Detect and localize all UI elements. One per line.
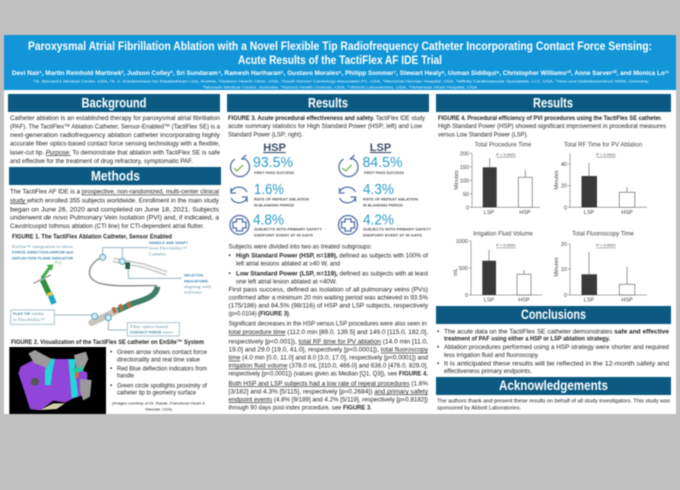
significant decreases paragraph: total procedure time (112.0 min [89.0, 139.5] and 149.0 [115.0, 182.0], bbox=[228, 329, 428, 336]
subgroup text: • bbox=[228, 253, 231, 260]
label: deflection indicators: DEFLECTION bbox=[184, 274, 203, 278]
background text bbox=[10, 115, 221, 165]
figure 1 heading: FIGURE 1. The TactiFlex Ablation Catheter, Sensor Enabled bbox=[12, 233, 172, 240]
background text: and effective for the treatment of drug refractory, symptomatic PAF. bbox=[10, 158, 193, 165]
repeat procedures paragraph: [3/182] and 4.3% [5/115], respectively [p=0.2684]) and primary safety bbox=[228, 388, 429, 395]
image credit: Vascular, USA) bbox=[145, 406, 173, 412]
conclusions text bbox=[437, 328, 670, 375]
figure 3: LSP statistics: 4.2% bbox=[363, 212, 394, 228]
figure 3: LSP statistics: 84.5% bbox=[362, 155, 403, 171]
icon: repeat arrows bbox=[231, 187, 247, 203]
label: handle and shaft bbox=[149, 241, 189, 257]
poster background bbox=[4, 35, 676, 414]
significant decreases paragraph: respectively [p<0.001]), total RF time for PV ablation (14.0 min [11.0, bbox=[228, 338, 428, 345]
icon: repeat arrows bbox=[340, 187, 356, 203]
figure 4 caption: versus Low Standard Power (LSP). bbox=[438, 131, 528, 138]
label: ensite bbox=[12, 244, 74, 264]
chart: total procedure time: P < 0.0001 bbox=[496, 152, 516, 157]
chart: total fluoroscopy time: 10 bbox=[561, 267, 567, 273]
label: deflection indicators: INDICATORS bbox=[184, 279, 209, 283]
chart: total fluoroscopy time: HSP bbox=[621, 298, 633, 304]
chart: total fluoroscopy time: P < 0.0001 bbox=[596, 243, 616, 248]
chart: total procedure time: 100 bbox=[460, 178, 469, 184]
figure 3: HSP statistics: HSP bbox=[263, 142, 286, 154]
subgroup text: left atrial lesions ablated at ≥40 W, and bbox=[236, 261, 341, 268]
repeat procedures paragraph: endpoint events (4.8% [9/189] and 4.2% [5/119], respectively [p=0.8182]) bbox=[228, 396, 428, 403]
conclusions text: The acute data on the TactiFlex SE catheter demonstrates safe and effective bbox=[444, 328, 670, 335]
heading: results: Results bbox=[308, 94, 348, 110]
label: handle and shaft: HANDLE AND SHAFT bbox=[149, 241, 189, 245]
first pass paragraph: (p=0.0104) (FIGURE 3). bbox=[228, 311, 291, 318]
background text: next-generation radiofrequency ablation catheter incorporating highly bbox=[10, 132, 221, 139]
panel: conclusions bbox=[436, 306, 671, 375]
methods text: The TactiFlex AF IDE is a prospective, non-randomized, multi-center clinical bbox=[10, 189, 219, 196]
chart: irrigation fluid volume: 500 bbox=[459, 266, 468, 272]
figure 3: LSP statistics: RATE OF REPEAT ABLATION bbox=[363, 198, 419, 202]
affiliations: ¹St. Bernard's Medical Center, USA, ²A. o. Krankenhaus her Elisabethinen Linz, Austria, ³Jackson Hearth Clinic, USA, ⁴South Denver Cardiology Associates PC, USA, ⁵Memorial Herman Hospital, USA, ⁶Affinity Cardiovascular Specialists, LLC, USA, ⁷Herz-und Diabeteszentrum NRW, Germany, bbox=[33, 80, 649, 84]
chart: total RF time bbox=[554, 143, 647, 216]
conclusions text: treatment of PAF using either a HSP or LSP ablation strategy. bbox=[444, 336, 610, 343]
chart: total fluoroscopy time: LSP bbox=[584, 298, 595, 304]
label: ensite: FORCE DIRECTION ARROW and bbox=[12, 251, 73, 255]
heading: conclusions: Conclusions bbox=[521, 306, 586, 322]
first pass paragraph: First pass success, defined as isolation of all pulmonary veins (PVs) bbox=[228, 287, 428, 294]
figure 3: LSP statistics: ENDPOINT EVENT AT 90 DAYS bbox=[363, 234, 423, 238]
conclusions text: Ablation procedures performed using a HSP strategy were shorter and required bbox=[444, 344, 670, 351]
label: contact force: Fiber optics-based bbox=[130, 324, 168, 329]
methods text: underwent de novo Pulmonary Vein Isolation (PVI) and, if indicated, a bbox=[10, 215, 220, 222]
icon: medical cross bbox=[230, 216, 249, 234]
figure 3: HSP statistics: RATE OF REPEAT ABLATION bbox=[254, 198, 310, 202]
label: handle and shaft: from FlexAbility™ bbox=[149, 246, 187, 251]
label: handle and shaft: Catheter bbox=[149, 252, 167, 257]
image credit bbox=[112, 400, 205, 412]
chart: total RF time: Total RF Time for PV Ablation bbox=[564, 143, 642, 149]
chart: total procedure time: 0 bbox=[466, 205, 469, 211]
figure 2 bullets: • bbox=[110, 349, 112, 356]
figure 4 caption: FIGURE 4. Procedural efficiency of PVI procedures using the TactiFlex SE catheter. bbox=[438, 115, 662, 122]
label: contact force bbox=[130, 324, 174, 335]
chart: total procedure time: Total Procedure Time bbox=[475, 143, 532, 149]
repeat procedures paragraph: Both HSP and LSP subjects had a low rate of repeat procedures (1.6% bbox=[228, 380, 429, 387]
conclusions text: • bbox=[437, 360, 439, 367]
figure 2 heading: FIGURE 2. Visualization of the TactiFlex SE catheter on EnSite™ System bbox=[11, 339, 204, 346]
background text: laser-cut tip. Purpose: To demonstrate that ablation with TactiFlex SE is safe bbox=[10, 149, 221, 156]
significant decreases paragraph: 19.0] and 29.0 [19.0, 41.0], respectively [p<0.0001]), total fluoroscopy bbox=[228, 347, 429, 354]
subgroup text: Low Standard Power (LSP, n=119), defined as subjects with at least bbox=[236, 271, 428, 278]
heading: acknowledgements: Acknowledgements bbox=[499, 377, 608, 393]
figure 3: LSP statistics: 4.3% bbox=[363, 182, 394, 198]
chart: total procedure time: LSP bbox=[484, 210, 495, 216]
methods text bbox=[10, 189, 220, 230]
chart: irrigation fluid volume: mL bbox=[453, 268, 459, 276]
figure 3: HSP statistics: 4.8% bbox=[253, 212, 284, 228]
figure 3 caption: FIGURE 3. Acute procedural effectiveness and safety. TactiFlex IDE study bbox=[228, 115, 426, 122]
figure 3: HSP statistics: 93.5% bbox=[253, 155, 293, 171]
repeat procedures paragraph: through 90 days post-index procedure, see FIGURE 3. bbox=[228, 404, 372, 411]
affiliations: ⁸Monash Medical Centre, Australia, ⁹Advent Health Orlando, USA, ¹⁰Abbott Laboratories, USA, ¹¹Arkansas Heart Hospital, USA bbox=[203, 86, 478, 90]
methods text: Cavotricuspid Isthmus ablation (CTI line) for CTI-dependent atrial flutter. bbox=[10, 223, 204, 230]
panel: methods bbox=[9, 167, 221, 230]
chart: irrigation fluid volume: 0 bbox=[465, 293, 468, 299]
figure 2 bullets: Red Blue deflection indicators from bbox=[117, 365, 207, 372]
chart: total RF time: Minutes bbox=[554, 170, 560, 190]
authors: Devi Nair¹, Martin Reinhold Martinek², Judson Colley³, Sri Sundaram⁴, Ramesh Hariharan⁵, Gustavo Morales⁶, Philipp Sommer⁷, Stewart Healy⁸, Usman Siddiqui⁹, Christopher Williams¹⁰, Anne Sarver¹⁰, and Monica Lo¹¹ bbox=[12, 69, 669, 77]
methods text: began on June 26, 2020 and completed on June 18, 2021. Subjects bbox=[10, 206, 219, 213]
figure 2 bullets: Green arrow shows contact force bbox=[117, 349, 208, 356]
chart: total fluoroscopy time: Total Fluoroscopy Time bbox=[572, 232, 635, 238]
chart: total RF time: LSP bbox=[584, 210, 595, 216]
chart: total RF time: 0 bbox=[564, 205, 567, 211]
subgroup text: Subjects were divided into two as treated subgroups: bbox=[228, 243, 372, 250]
affiliations bbox=[33, 80, 649, 90]
chart: irrigation fluid volume: Irrigation Fluid Volume bbox=[473, 232, 534, 238]
significant decreases paragraph: irrigation fluid volume (378.0 mL [310.0, 466.0] and 636.0 [476.0, 829.0], bbox=[228, 363, 428, 370]
label: flex tip bbox=[13, 311, 45, 322]
subgroup text: High Standard Power (HSP, n=189), defined as subjects with 100% of bbox=[236, 253, 428, 260]
figure 3: HSP statistics: ENDPOINT EVENT AT 90 DAYS bbox=[254, 234, 314, 238]
figure 3: HSP statistics: 1.6% bbox=[254, 182, 284, 198]
acknowledgements text: The authors thank and present these results on behalf of all study investigators. This study was bbox=[437, 398, 670, 404]
figure 3 caption bbox=[228, 115, 426, 138]
chart: irrigation fluid volume: 1000 bbox=[456, 239, 468, 245]
background text: Catheter ablation is an established therapy for paroxysmal atrial fibrillation bbox=[10, 115, 221, 122]
icon: circular arrow check bbox=[339, 155, 358, 177]
panel: background bbox=[8, 94, 221, 165]
chart: total procedure time: 200 bbox=[460, 151, 469, 157]
figure 3: HSP statistics: FIRST PASS SUCCESS bbox=[254, 171, 295, 175]
conclusions text: • bbox=[437, 344, 439, 351]
figure 2 bullets: Green circle spotlights proximity of bbox=[117, 382, 207, 389]
icon: medical cross bbox=[338, 216, 358, 234]
figure 4 caption bbox=[438, 115, 666, 138]
header banner bbox=[4, 35, 676, 90]
panel: acknowledgements bbox=[436, 377, 671, 411]
conclusions text: effectiveness primary endpoints. bbox=[444, 368, 532, 375]
first pass paragraph: confirmed after a minimum 20 min waiting period was achieved in 93.5% bbox=[228, 295, 428, 302]
first pass paragraph bbox=[228, 287, 429, 318]
chart: total procedure time: HSP bbox=[519, 210, 531, 216]
figure 4 caption: High Standard Power (HSP) showed significant improvement in procedural measures bbox=[438, 123, 666, 130]
figure 2 bullets: catheter tip to geometry surface bbox=[117, 389, 197, 396]
panel: results right bbox=[436, 94, 671, 304]
subgroup text: • bbox=[228, 271, 231, 278]
methods text: study which enrolled 355 subjects worldwide. Enrollment in the main study bbox=[10, 197, 220, 204]
chart: irrigation fluid volume bbox=[453, 232, 542, 304]
conclusions text: • bbox=[437, 328, 439, 335]
chart: total RF time: P < 0.0001 bbox=[596, 152, 616, 157]
heading: results: Results bbox=[533, 94, 573, 110]
label: contact force: CONTACT FORCE sensor bbox=[130, 330, 174, 335]
figure 2 bullets: • bbox=[110, 382, 112, 389]
icon: circular arrow check bbox=[231, 155, 249, 177]
label: deflection indicators bbox=[184, 274, 211, 295]
figure 3: LSP statistics: IN BLANKING PERIOD bbox=[363, 203, 404, 207]
chart: total fluoroscopy time bbox=[554, 232, 647, 304]
figure 2: heart map image bbox=[9, 347, 106, 414]
figure 3: LSP statistics: FIRST PASS SUCCESS bbox=[364, 171, 405, 175]
figure 1: catheter diagram bbox=[11, 241, 211, 336]
figure 3: HSP statistics bbox=[230, 142, 323, 238]
chart: total fluoroscopy time: 0 bbox=[564, 293, 567, 299]
figure 3: LSP statistics: SUBJECTS WITH PRIMARY SAFETY bbox=[363, 228, 432, 232]
label: flex tip: FLEX TIP similar bbox=[13, 311, 45, 316]
figure 2 bullets: • bbox=[110, 365, 112, 372]
figure 2 bullets: directionality and real time value bbox=[117, 356, 201, 363]
subgroup text: one left atrial lesion ablated at <40W. bbox=[236, 279, 337, 286]
figure 3 caption: Standard Power (LSP; right). bbox=[228, 131, 303, 138]
label: ensite: DEFLECTION PLANE INDICATOR bbox=[12, 256, 74, 260]
heading: methods: Methods bbox=[91, 168, 140, 184]
chart: total procedure time: 50 bbox=[463, 192, 469, 198]
acknowledgements text bbox=[437, 398, 670, 411]
title bbox=[28, 41, 652, 67]
repeat procedures paragraph bbox=[228, 380, 429, 411]
significant decreases paragraph: time (4.0 min [0.0, 11.0] and 8.0 [3.0, 17.0], respectively [p<0.0001]) and bbox=[228, 355, 429, 362]
figure 3: LSP statistics bbox=[338, 142, 432, 238]
significant decreases paragraph: respectively [p<0.0001]) (values given as Median [Q1, Q3]), see FIGURE 4. bbox=[228, 371, 428, 378]
background text: (PAF). The TactiFlex™ Ablation Catheter, Sensor-Enabled™ (TactiFlex SE) is a bbox=[10, 124, 221, 131]
chart: irrigation fluid volume: HSP bbox=[518, 298, 530, 304]
image credit: (Images courtesy of Dr. Rasak, Franciscan Heart & bbox=[112, 400, 205, 406]
label: deflection indicators: aligning with bbox=[184, 284, 211, 289]
conclusions text: It is anticipated these results will be reflected in the 12-month safety and bbox=[444, 360, 670, 367]
chart: total procedure time: Minutes bbox=[454, 170, 460, 190]
significant decreases paragraph: Significant decreases in the HSP versus LSP procedures were also seen in: bbox=[228, 321, 428, 328]
label: flex tip: to FlexAbility™ bbox=[13, 317, 45, 322]
figure 3: HSP statistics: SUBJECTS WITH PRIMARY SAFETY bbox=[254, 228, 323, 232]
chart: total procedure time bbox=[454, 143, 540, 216]
first pass paragraph: (175/186) and 84.5% (98/116) of HSP and LSP subjects, respectively bbox=[228, 303, 429, 310]
chart: total procedure time: 150 bbox=[460, 165, 469, 171]
label: ensite: 19 g bbox=[54, 260, 61, 264]
figure 3 caption: acute summary statistics for High Standard Power (HSP; left) and Low bbox=[228, 123, 423, 130]
chart: total RF time: 20 bbox=[561, 184, 567, 190]
heading: background: Background bbox=[82, 94, 146, 110]
acknowledgements text: sponsored by Abbott Laboratories. bbox=[437, 405, 521, 411]
icon: catheter bbox=[11, 248, 182, 336]
background text: accurate fiber optics-based contact force sensing technology with a flexible, bbox=[10, 141, 220, 148]
title: Acute Results of the TactiFlex AF IDE Trial bbox=[238, 55, 442, 67]
figure 3: LSP statistics: LSP bbox=[370, 142, 391, 154]
chart: irrigation fluid volume: P < 0.0001 bbox=[496, 243, 516, 248]
figure 2 bullets: handle bbox=[117, 373, 134, 380]
chart: irrigation fluid volume: LSP bbox=[484, 298, 495, 304]
chart: total RF time: HSP bbox=[621, 210, 633, 216]
subgroup text bbox=[228, 243, 428, 286]
panel: results middle bbox=[227, 94, 432, 411]
label: ensite: EnSite™ integration to show bbox=[12, 244, 73, 249]
chart: total RF time: 40 bbox=[561, 162, 567, 168]
label: deflection indicators: software bbox=[184, 290, 202, 295]
conclusions text: less irrigation fluid and fluoroscopy. bbox=[444, 352, 539, 359]
chart: total fluoroscopy time: 20 bbox=[561, 242, 567, 248]
figure 3: HSP statistics: IN BLANKING PERIOD bbox=[254, 203, 295, 207]
chart: total fluoroscopy time: Minutes bbox=[554, 257, 560, 277]
significant decreases paragraph bbox=[228, 321, 429, 378]
figure 2 bullets bbox=[110, 349, 208, 396]
